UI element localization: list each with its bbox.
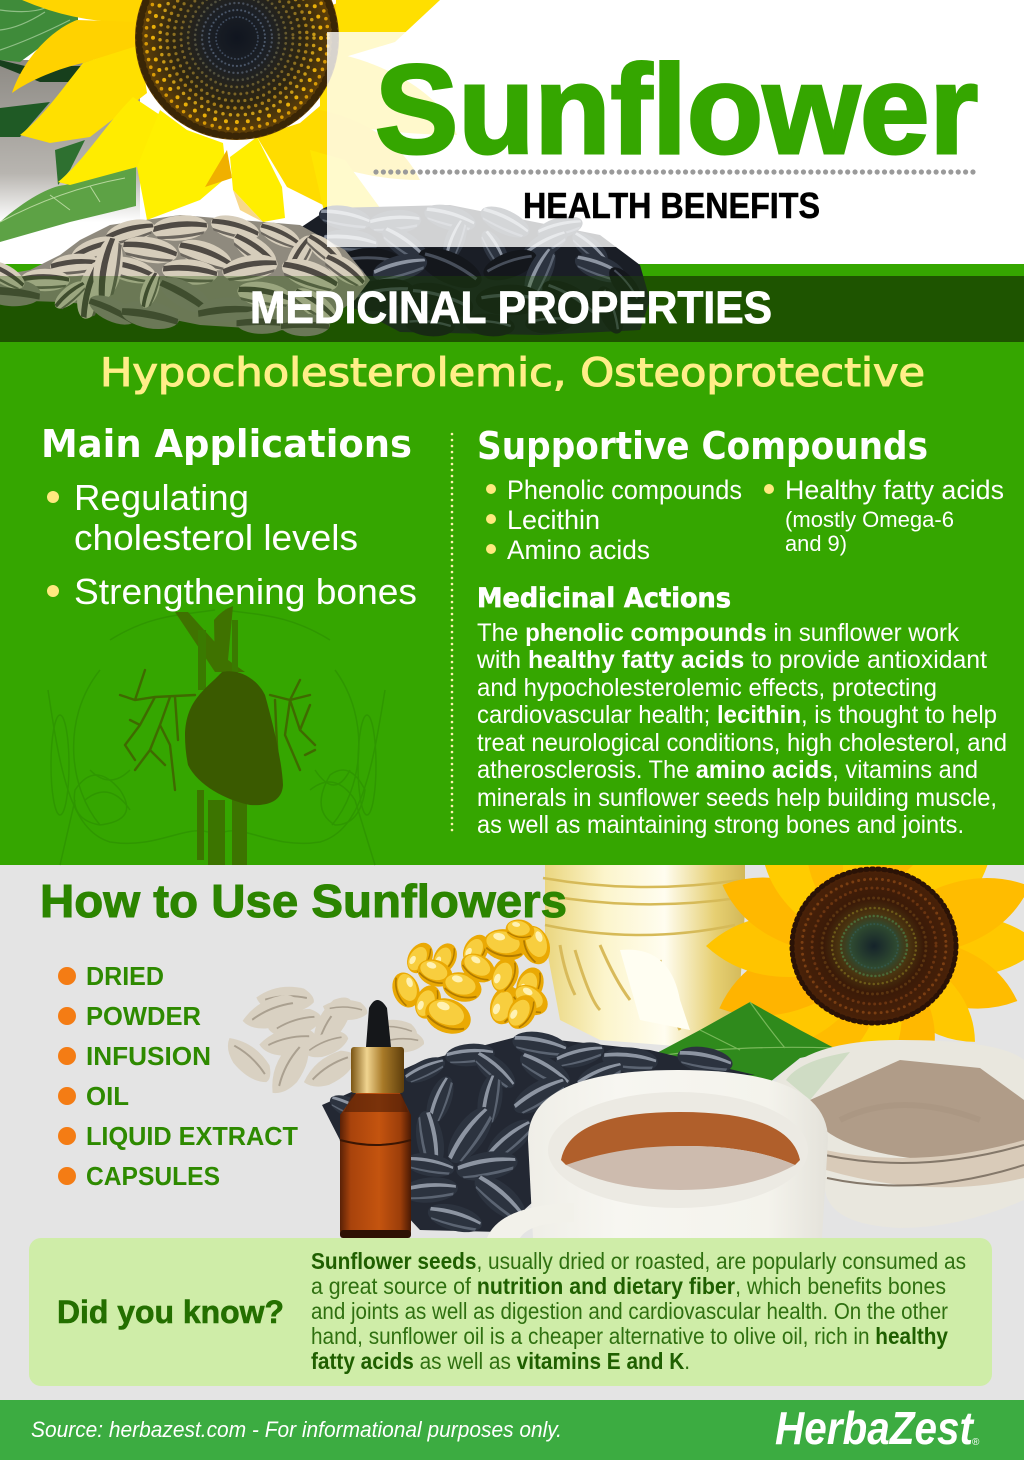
photo backdrop: [0, 60, 140, 222]
labels: LIQUID EXTRACT: [86, 1121, 298, 1151]
compound list: Amino acids: [507, 535, 650, 565]
heart: [185, 671, 283, 805]
heading: Main Applications: [41, 422, 412, 466]
photo: dropper bottle: [340, 1000, 411, 1238]
dotted divider: [376, 169, 978, 175]
dotted vertical divider: [451, 434, 453, 832]
photo: sunflower seed piles: [0, 200, 650, 338]
seed disk: [135, 0, 339, 140]
text: strengthening bones: Strengthening bones: [74, 571, 417, 612]
subheading: medicinal actions: Medicinal Actions: [477, 583, 731, 614]
paragraph: and joints as well as digestion and cardiovascular health. On the other: [311, 1298, 948, 1324]
paragraph: medicinal actions: with healthy fatty acids to provide antioxidant: [476, 646, 987, 674]
dark seeds pile: [300, 200, 650, 338]
header background: [0, 0, 1024, 264]
labels: OIL: [86, 1081, 129, 1111]
bullets: [486, 484, 774, 554]
paragraph: medicinal actions: The phenolic compounds in sunflower work: [477, 619, 959, 647]
bronchial branches: [120, 670, 315, 790]
compound list: Lecithin: [507, 505, 600, 535]
tea: [561, 1112, 800, 1165]
paragraph: a great source of nutrition and dietary fiber, which benefits bones: [311, 1273, 946, 1299]
paragraph: Sunflower seeds, usually dried or roasted, are popularly consumed as: [311, 1248, 966, 1274]
striped light seeds: [0, 211, 370, 336]
text: cholesterol levels: cholesterol levels: [74, 517, 358, 558]
petals to the right, faded by overlay: [335, 0, 440, 60]
cup interior: [548, 1092, 808, 1208]
panel: how to use background: [0, 865, 1024, 1400]
heading: how to use sunflowers: How to Use Sunflowers: [40, 875, 567, 927]
labels: INFUSION: [86, 1041, 211, 1071]
footer: [0, 1400, 1024, 1460]
illustration: heart and lungs watermark: [48, 606, 385, 865]
photo: tea cup: [487, 1070, 828, 1238]
text: regulating: Regulating: [74, 477, 249, 518]
vessels: [175, 606, 245, 672]
compound list: (mostly Omega-6: [785, 507, 954, 532]
faint torso lines: [48, 610, 385, 865]
photo: sunflower with leaves: [0, 0, 457, 242]
panel: main applications: [41, 422, 417, 612]
photo: softgel capsules: [388, 917, 555, 1040]
list: forms of use: [58, 961, 298, 1191]
labels: CAPSULES: [86, 1161, 220, 1191]
photo: hulled seeds: [219, 984, 425, 1101]
bullet 1: [47, 491, 59, 503]
photo: dark seed pile: [322, 1028, 755, 1237]
medicinal properties dark band: [0, 276, 1024, 342]
paragraph: fatty acids as well as vitamins E and K.: [311, 1348, 690, 1374]
paragraph: medicinal actions: as well as maintaining strong bones and joints.: [477, 811, 964, 839]
photo: powder bowl: [774, 1040, 1024, 1228]
compound list: and 9): [785, 531, 847, 556]
paragraph: medicinal actions: minerals in sunflower seeds help building muscle,: [477, 784, 997, 812]
paragraph: medicinal actions: [476, 619, 1007, 839]
source note: Source: herbazest.com - For informational purposes only.: [31, 1417, 562, 1442]
heading: Supportive Compounds: [477, 424, 928, 468]
petals: [706, 865, 1024, 1047]
paragraph: medicinal actions: and hypocholesterolemic effects, protecting: [477, 674, 937, 702]
paragraph: [311, 1248, 966, 1374]
paragraph: medicinal actions: cardiovascular health; lecithin, is thought to help: [477, 701, 997, 729]
photo: oil bottle: [543, 865, 745, 1048]
handle: [487, 1203, 574, 1238]
bullet 2: [47, 585, 59, 597]
labels: [86, 961, 298, 1191]
paragraph: medicinal actions: atherosclerosis. The amino acids, vitamins and: [477, 756, 978, 784]
translucent overlay behind title: [327, 32, 620, 247]
seed disk: [791, 868, 957, 1024]
labels: POWDER: [86, 1001, 201, 1031]
paragraph: medicinal actions: treat neurological conditions, high cholesterol, and: [477, 729, 1007, 757]
registered mark: ®: [972, 1437, 980, 1448]
tea reflection: [566, 1146, 795, 1190]
compound list: Healthy fatty acids: [785, 475, 1004, 505]
compound list: Phenolic compounds: [507, 475, 742, 505]
cup body: [528, 1070, 828, 1238]
petals: [22, 0, 145, 22]
bullets: [58, 967, 76, 1185]
body background: green panel: [0, 264, 1024, 865]
properties line: Hypocholesterolemic, Osteoprotective: [100, 351, 925, 396]
panel: supportive compounds: [476, 424, 1007, 839]
leaf bottom-left: [0, 167, 136, 242]
band tint over seeds: [0, 276, 1024, 342]
leaf: [653, 1002, 838, 1082]
title: Sunflower: [375, 39, 978, 180]
heading: Did you know?: [57, 1294, 284, 1330]
logo: HerbaZest: [775, 1402, 974, 1454]
photo: sunflower in bouquet: [658, 865, 1024, 1080]
paragraph: hand, sunflower oil is a cheaper alternative to olive oil, rich in healthy: [311, 1323, 948, 1349]
panel: did you know: [29, 1238, 992, 1386]
subtitle: HEALTH BENEFITS: [523, 185, 820, 226]
labels: DRIED: [86, 961, 164, 991]
heading: medicinal properties: MEDICINAL PROPERTIES: [250, 282, 772, 333]
compound list: [507, 475, 1004, 565]
